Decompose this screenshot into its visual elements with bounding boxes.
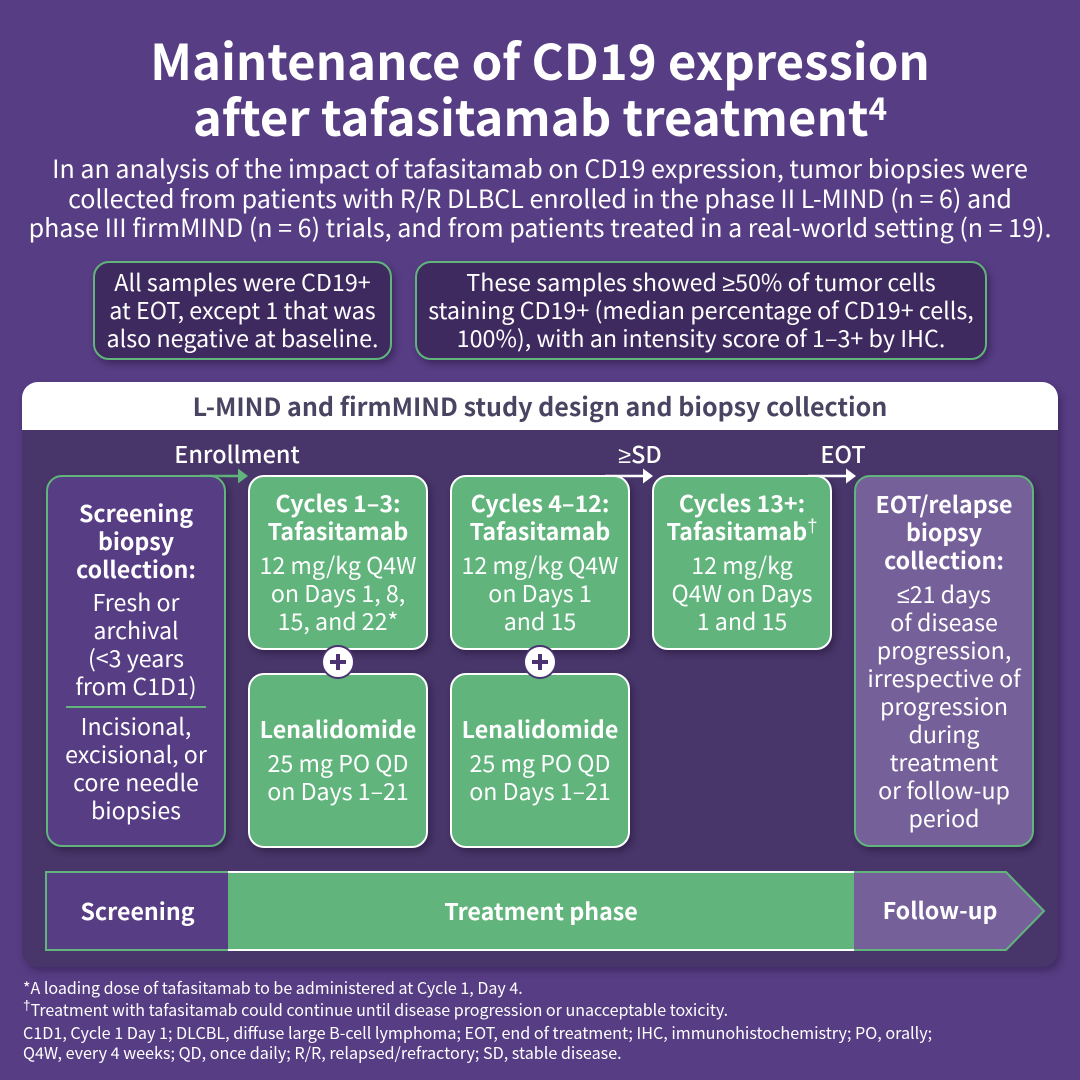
box: cycles 13+ [652, 475, 832, 650]
box: EOT relapse biopsy: irrespective of [867, 660, 1021, 694]
box: screening biopsy: core needle [73, 764, 199, 798]
box: EOT relapse biopsy: or follow-up [878, 772, 1010, 806]
title: after tafasitamab treatment4 [193, 80, 887, 151]
callout: staining result [415, 261, 987, 360]
phase: follow-up [854, 871, 1046, 951]
box: EOT relapse biopsy: progression [880, 688, 1008, 722]
box: cycles 13+: Q4W on Days [672, 575, 812, 609]
box: cycles 1-3: Cycles 1–3: [275, 485, 401, 519]
footnotes [23, 975, 932, 1064]
phase: screening: Screening [80, 893, 195, 927]
box: EOT relapse biopsy: EOT/relapse [876, 486, 1012, 520]
label: Enrollment: Enrollment [174, 436, 300, 470]
arrow: EOT [808, 468, 856, 484]
box: screening biopsy: collection: Incisional, [76, 551, 196, 742]
phase: treatment: Treatment phase [444, 893, 638, 927]
box: lenalidomide 1: 25 mg PO QD [268, 745, 408, 779]
box: screening biopsy: Screening [79, 495, 193, 529]
callout: staining result: staining CD19+ (median percentage of CD19+ cells, [428, 292, 974, 326]
box: cycles 13+: Tafasitamab† [666, 513, 818, 547]
title [150, 24, 930, 151]
callout: staining result: These samples showed ≥50% of tumor cells [466, 264, 936, 298]
box: EOT relapse biopsy: treatment [890, 744, 998, 778]
footnotes: C1D1, Cycle 1 Day 1; DLCBL, diffuse large B-cell lymphoma; EOT, end of treatment; IHC, immunohistochemistry; PO, orally; [23, 1020, 932, 1044]
phase: follow-up: Follow-up [883, 892, 997, 926]
timeline bar [45, 871, 1046, 951]
intro text: In an analysis of the impact of tafasitamab on CD19 expression, tumor biopsies were [52, 150, 1028, 186]
box: lenalidomide 2: on Days 1–21 [469, 773, 611, 807]
box: EOT relapse biopsy: during [908, 716, 980, 750]
callout: CD19+ at EOT: also negative at baseline. [106, 320, 378, 354]
icon: plus 2 [523, 645, 557, 679]
box: cycles 1-3: on Days 1, 8, [271, 575, 405, 609]
box: EOT relapse biopsy: collection: [884, 542, 1004, 576]
box: lenalidomide 2: 25 mg PO QD [470, 745, 610, 779]
box: lenalidomide 1: on Days 1–21 [267, 773, 409, 807]
intro text: phase III firmMIND (n = 6) trials, and from patients treated in a real-world setting (n = 19). [29, 209, 1051, 245]
callout: CD19+ at EOT: at EOT, except 1 that was [109, 292, 376, 326]
box: screening biopsy: archival [93, 612, 179, 646]
title: Maintenance of CD19 expression [150, 24, 930, 95]
box: screening biopsy: biopsy [98, 523, 174, 557]
box: screening biopsy: from C1D1) [75, 668, 197, 702]
box: cycles 4-12: on Days 1 [488, 575, 592, 609]
box: EOT relapse biopsy: ≤21 days [897, 576, 991, 610]
box: screening biopsy: Fresh or [92, 584, 180, 618]
box: cycles 13+: 1 and 15 [697, 603, 787, 637]
footnotes: Q4W, every 4 weeks; QD, once daily; R/R, relapsed/refractory; SD, stable disease. [23, 1040, 622, 1064]
box: cycles 1-3: Tafasitamab [268, 513, 408, 547]
box: cycles 4-12: Tafasitamab [470, 513, 610, 547]
icon: plus 1 [321, 645, 355, 679]
box: lenalidomide 2 [450, 673, 630, 848]
box: cycles 4-12: Cycles 4–12: [471, 485, 609, 519]
arrow: enrollment [200, 468, 248, 484]
box: cycles 1-3 [248, 475, 428, 650]
box: lenalidomide 2: Lenalidomide [462, 711, 618, 745]
box: cycles 13+: 12 mg/kg [691, 547, 793, 581]
box: screening biopsy: excisional, or [65, 736, 207, 770]
panel heading: L-MIND and firmMIND study design and biopsy collection [193, 388, 887, 424]
box: screening biopsy: biopsies [91, 792, 181, 826]
panel: study design [22, 383, 1058, 967]
arrow: SD [605, 468, 653, 484]
label: SD: ≥SD [618, 436, 662, 470]
box: cycles 4-12 [450, 475, 630, 650]
label: EOT: EOT [820, 436, 866, 470]
box: EOT relapse biopsy: progression, [877, 632, 1011, 666]
box: EOT relapse biopsy: of disease [890, 604, 998, 638]
panel heading [22, 382, 1058, 430]
box: lenalidomide 1 [248, 673, 428, 848]
box: cycles 1-3: 12 mg/kg Q4W [259, 547, 417, 581]
footnotes: †Treatment with tafasitamab could continue until disease progression or unacceptable toxicity. [23, 997, 728, 1021]
footnotes: *A loading dose of tafasitamab to be administered at Cycle 1, Day 4. [23, 975, 523, 999]
box: cycles 4-12: and 15 [504, 603, 576, 637]
box: EOT relapse biopsy [854, 475, 1034, 847]
phase: screening [45, 871, 228, 951]
intro text: collected from patients with R/R DLBCL enrolled in the phase II L-MIND (n = 6) and [68, 180, 1012, 216]
box: cycles 4-12: 12 mg/kg Q4W [461, 547, 619, 581]
box: screening biopsy [46, 475, 226, 847]
phase: treatment [228, 871, 854, 951]
callout: CD19+ at EOT: All samples were CD19+ [114, 264, 371, 298]
box: cycles 1-3: 15, and 22* [278, 603, 398, 637]
box: cycles 13+: Cycles 13+: [679, 485, 805, 519]
box: EOT relapse biopsy: biopsy [906, 514, 982, 548]
callout: staining result: 100%), with an intensity score of 1–3+ by IHC. [457, 320, 945, 354]
box: screening biopsy: (<3 years [88, 640, 184, 674]
callout: CD19+ at EOT [93, 261, 392, 360]
intro text [29, 150, 1051, 245]
box: EOT relapse biopsy: period [908, 800, 980, 834]
box: lenalidomide 1: Lenalidomide [260, 711, 416, 745]
